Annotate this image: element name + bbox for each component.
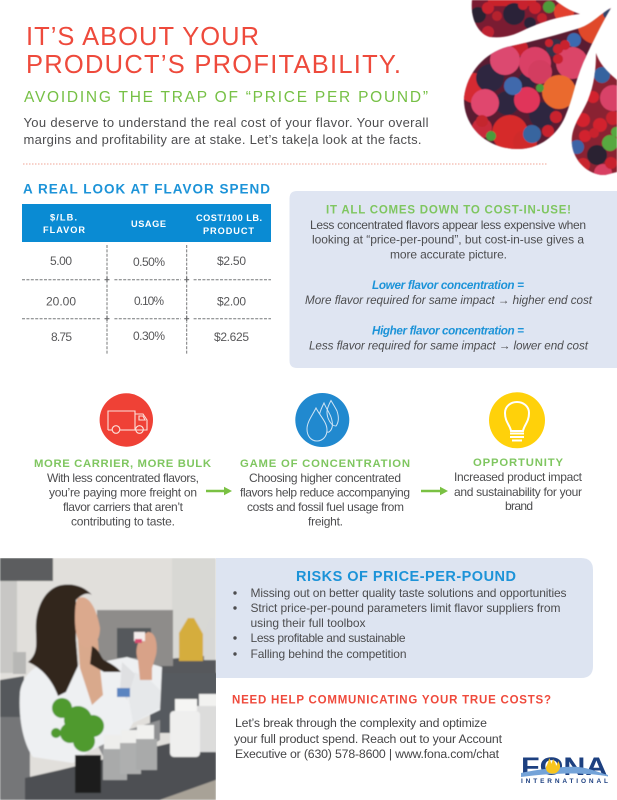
column: game of concentration: Choosing higher concentrated (249, 471, 401, 485)
contact text: your full product spend. Reach out to your Account (234, 732, 503, 746)
neck (78, 640, 103, 705)
heading: need help: NEED HELP COMMUNICATING YOUR TRUE COSTS? (232, 694, 551, 706)
column: opportunity: OPPORTUNITY (473, 457, 563, 469)
intro text: You deserve to understand the real cost of your flavor. Your overall (24, 115, 429, 130)
table row 1: 5.00 (50, 254, 72, 268)
panel: cost-in-use: Less flavor required for same impact → lower end cost (309, 340, 589, 353)
table header: USAGE (131, 219, 166, 229)
microwave (97, 610, 173, 666)
hair (28, 584, 92, 696)
drop: top (470, 0, 580, 38)
table header (22, 204, 271, 242)
column: game of concentration: costs and fossil fuel usage from (247, 500, 404, 514)
contact text: Executive or (630) 578-8600 | www.fona.com/chat (235, 747, 500, 761)
table row 3: 0.30% (133, 329, 165, 343)
photo: scientist in lab (0, 558, 217, 800)
title: IT’S ABOUT YOUR (26, 23, 259, 51)
lab coat (20, 657, 162, 763)
drop: middle (459, 5, 615, 154)
icon: truck (100, 393, 153, 447)
drop: right (570, 53, 617, 176)
table header: FLAVOR (43, 225, 85, 235)
table: flavor spend (22, 204, 271, 355)
panel: cost-in-use: IT ALL COMES DOWN TO COST-IN-USE! (326, 204, 571, 216)
panel: risks of price-per-pound: Less profitable and sustainable (250, 631, 406, 645)
table row 2: 20.00 (46, 294, 76, 308)
icon: drops (295, 393, 349, 447)
column: opportunity: brand (505, 499, 533, 513)
table header: COST/100 LB. (196, 213, 262, 223)
arrow (421, 487, 448, 495)
panel: risks of price-per-pound (216, 558, 593, 678)
logo: FONA International: INTERNATIONAL (521, 778, 608, 785)
column: game of concentration (240, 458, 410, 528)
column: more carrier: MORE CARRIER, MORE BULK (34, 458, 212, 470)
panel: risks of price-per-pound: Missing out on better quality taste solutions and opportunities (250, 586, 566, 600)
contact text (234, 716, 503, 761)
icon: light bulb (489, 392, 545, 448)
column: more carrier: With less concentrated flavors, (47, 471, 199, 485)
panel: cost-in-use: Higher flavor concentration = (372, 325, 524, 338)
table heading: A REAL LOOK AT FLAVOR SPEND (23, 182, 270, 196)
panel: risks of price-per-pound: using their full toolbox (250, 616, 366, 630)
logo: FONA International: FONA (521, 753, 607, 780)
column: game of concentration: flavors help reduce accompanying (240, 486, 410, 500)
hand and cup (136, 632, 157, 680)
table row 1: $2.50 (217, 254, 246, 268)
panel: risks of price-per-pound: RISKS OF PRICE-PER-POUND (296, 569, 516, 585)
title: PRODUCT’S PROFITABILITY. (26, 51, 401, 79)
column: more carrier: flavor carriers that aren’t (63, 500, 184, 514)
panel: risks of price-per-pound: Strict price-per-pound parameters limit flavor suppliers from (250, 601, 560, 615)
title (26, 23, 401, 79)
arrow (206, 487, 232, 495)
panel: risks of price-per-pound: Falling behind the competition (250, 647, 406, 661)
contact text: Let’s break through the complexity and optimize (235, 716, 487, 730)
intro text: margins and profitability are at stake. Let’s take|a look at the facts. (24, 132, 422, 147)
table row 2 (46, 294, 246, 308)
column: more carrier (34, 458, 212, 528)
panel: cost-in-use (290, 191, 617, 368)
panel: cost-in-use: looking at “price-per-pound”, but cost-in-use gives a (312, 233, 584, 247)
small clear bottles (104, 735, 126, 749)
image: berry drops (459, 0, 617, 182)
counter and cabinets (0, 676, 24, 717)
face (75, 597, 100, 647)
table row 2: 0.10% (134, 294, 164, 308)
jugs (179, 618, 203, 661)
column: more carrier: contributing to taste. (71, 514, 175, 528)
table header: PRODUCT (203, 226, 254, 236)
table row 1: 0.50% (133, 255, 165, 269)
column: opportunity: and sustainability for your (454, 485, 582, 499)
table row 3 (51, 329, 249, 344)
counter top (24, 742, 216, 800)
column: opportunity (454, 457, 583, 513)
table row 3: 8.75 (51, 330, 72, 344)
table row 3: $2.625 (214, 330, 249, 344)
intro text (24, 115, 429, 147)
panel: cost-in-use: Lower flavor concentration = (372, 279, 524, 292)
white bottles (199, 694, 217, 706)
column: game of concentration: GAME OF CONCENTRATION (240, 458, 410, 470)
table header: $/LB. (50, 212, 77, 222)
column: opportunity: Increased product impact (454, 470, 583, 484)
table row 2: $2.00 (217, 294, 246, 308)
panel: cost-in-use: Less concentrated flavors appear less expensive when (310, 218, 586, 232)
panel: cost-in-use: more accurate picture. (390, 248, 507, 262)
table row 1 (50, 254, 246, 269)
subtitle: AVOIDING THE TRAP OF “PRICE PER POUND” (24, 89, 428, 106)
panel: cost-in-use: More flavor required for same impact → higher end cost (305, 294, 593, 307)
column: game of concentration: freight. (308, 514, 343, 528)
column: more carrier: you’re paying more freight on (49, 486, 197, 500)
plant (51, 698, 104, 752)
